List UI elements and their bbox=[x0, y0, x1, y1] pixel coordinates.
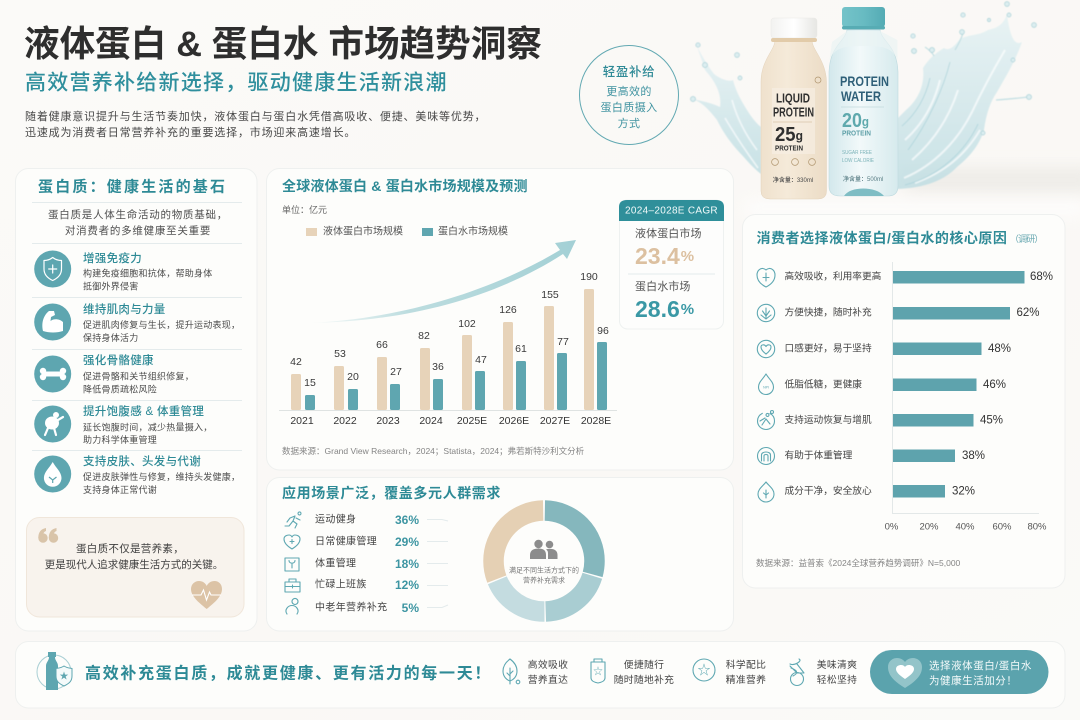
item: bone: 促进骨骼和关节组织修复， bbox=[83, 370, 194, 382]
horizontal bar chart: 62% bbox=[1016, 307, 1040, 319]
horizontal bar chart: 60% bbox=[992, 522, 1012, 532]
protein water bottle: SUGAR FREE bbox=[842, 150, 872, 156]
reason: low fat and sugar: 低脂低糖，更健康 bbox=[784, 378, 862, 390]
item: skin and metabolism: 支持身体正常代谢 bbox=[83, 484, 157, 495]
horizontal bar chart: 20% bbox=[919, 522, 939, 532]
chart heading: 全球液体蛋白 & 蛋白水市场规模及预测 bbox=[282, 178, 528, 194]
donut center: 营养补充需求 bbox=[523, 576, 565, 584]
item: bone: 强化骨骼健康 bbox=[83, 353, 154, 367]
bar chart: 36 bbox=[432, 361, 444, 373]
feature: taste: 美味清爽 bbox=[817, 658, 857, 671]
bar chart: 2021 bbox=[290, 415, 314, 427]
item: satiety: 延长饱腹时间，减少热量摄入， bbox=[83, 421, 213, 432]
row: daily health bbox=[284, 534, 448, 549]
horizontal bar chart bbox=[885, 262, 1053, 532]
horizontal bar chart: 48% bbox=[988, 343, 1011, 355]
bar chart: 53 bbox=[334, 348, 346, 360]
bar chart: 82 bbox=[418, 330, 430, 342]
bar chart: 42 bbox=[290, 356, 302, 368]
horizontal bar chart: 45% bbox=[980, 414, 1003, 426]
panel intro bbox=[48, 208, 228, 237]
liquid protein bottle: 净含量：330ml bbox=[773, 176, 813, 184]
bar chart: 47 bbox=[475, 354, 487, 366]
bar chart: 77 bbox=[557, 336, 569, 348]
feature: scientific formula: 科学配比 bbox=[726, 658, 766, 671]
row: sports bbox=[285, 512, 448, 528]
reasons heading: 消费者选择液体蛋白/蛋白水的核心原因 bbox=[756, 230, 1007, 246]
protein water bottle: 20g bbox=[842, 110, 869, 132]
callout: light supplement circle bbox=[580, 46, 678, 144]
row: weight management: 体重管理 bbox=[315, 556, 356, 570]
bar chart: 126 bbox=[499, 304, 517, 316]
bar chart: 2026E bbox=[499, 415, 529, 427]
protein water bottle: 净含量：500ml bbox=[843, 175, 883, 183]
quote box: 更是现代人追求健康生活方式的关键。 bbox=[45, 558, 223, 571]
feature: taste: 轻松坚持 bbox=[817, 673, 857, 686]
item: muscle bbox=[34, 302, 240, 343]
reason: weight: 有助于体重管理 bbox=[784, 448, 853, 462]
item: bone bbox=[34, 353, 194, 394]
item: immunity: 构建免疫细胞和抗体，帮助身体 bbox=[83, 268, 213, 278]
legend: 液体蛋白市场规模 bbox=[323, 224, 403, 238]
horizontal bar chart: 38% bbox=[962, 450, 985, 462]
icon: bottle with shield bbox=[37, 652, 72, 690]
donut center: 满足不同生活方式下的 bbox=[509, 566, 579, 574]
call to action button bbox=[870, 650, 1048, 694]
panel: consumer reasons bbox=[742, 214, 1065, 588]
call to action button: 选择液体蛋白/蛋白水 bbox=[929, 659, 1032, 672]
growth arrow bbox=[308, 240, 576, 323]
item: immunity bbox=[34, 250, 213, 292]
protein water bottle: LOW CALORIE bbox=[842, 158, 874, 164]
callout: light supplement circle: 方式 bbox=[618, 116, 640, 130]
reason: recovery bbox=[758, 410, 872, 430]
banner slogan: 高效补充蛋白质，成就更健康、更有活力的每一天！ bbox=[85, 664, 492, 682]
row: seniors: 中老年营养补充 bbox=[315, 600, 387, 614]
bar chart: 102 bbox=[458, 318, 476, 330]
panel intro: 蛋白质是人体生命活动的物质基础， bbox=[48, 208, 228, 221]
item: skin and metabolism: 促进皮肤弹性与修复，维持头发健康， bbox=[83, 471, 240, 482]
protein water bottle: PROTEIN bbox=[840, 73, 889, 89]
CAGR card: 28.6% bbox=[635, 296, 694, 322]
item: muscle: 促进肌肉修复与生长，提升运动表现， bbox=[83, 319, 240, 330]
item: satiety bbox=[34, 404, 213, 445]
panel: market size chart bbox=[266, 168, 734, 470]
horizontal bar chart: 80% bbox=[1027, 522, 1047, 532]
title: 液体蛋白 & 蛋白水 市场趋势洞察 bbox=[24, 24, 542, 64]
reason: clean ingredients: 成分干净，安全放心 bbox=[784, 484, 872, 497]
feature: scientific formula bbox=[693, 658, 766, 686]
icon: bottle with shield: ★ bbox=[59, 671, 69, 681]
panel: protein foundation bbox=[16, 168, 257, 631]
liquid protein bottle: PROTEIN bbox=[775, 144, 803, 152]
reason: weight bbox=[758, 448, 853, 464]
row: sports: 运动健身 bbox=[315, 512, 356, 526]
reason: taste: 口感更好，易于坚持 bbox=[784, 342, 872, 354]
quote box: 蛋白质不仅是营养素， bbox=[76, 542, 184, 555]
bar chart: 66 bbox=[376, 339, 388, 351]
quote box bbox=[26, 518, 244, 617]
CAGR card: 2024–2028E CAGR bbox=[625, 206, 718, 216]
bar chart: 155 bbox=[541, 289, 559, 301]
row: office workers: 12% bbox=[395, 578, 419, 592]
panel: use cases bbox=[266, 478, 734, 631]
liquid protein bottle: 25g bbox=[775, 124, 803, 146]
callout: light supplement circle: 更高效的 bbox=[606, 84, 652, 98]
protein water bottle: PROTEIN bbox=[842, 128, 871, 138]
bar chart: 2023 bbox=[376, 415, 400, 427]
row: daily health: 29% bbox=[395, 535, 419, 549]
item: satiety: 提升饱腹感 & 体重管理 bbox=[83, 404, 204, 418]
row: weight management: 18% bbox=[395, 557, 419, 571]
chart source: 数据来源：Grand View Research，2024；Statista，2024；弗若斯特沙利文分析 bbox=[282, 446, 585, 456]
bar chart: 96 bbox=[597, 325, 609, 337]
item: muscle: 保持身体活力 bbox=[83, 332, 139, 343]
bar chart: 2022 bbox=[333, 415, 357, 427]
reason: taste bbox=[757, 340, 872, 358]
liquid protein bottle: LIQUID bbox=[776, 90, 810, 106]
reason: clean ingredients bbox=[758, 482, 872, 502]
feature: taste bbox=[790, 658, 857, 686]
CAGR card bbox=[619, 200, 724, 329]
reason: convenience: 方便快捷，随时补充 bbox=[784, 306, 872, 318]
feature: portable bbox=[591, 658, 674, 686]
item: muscle: 维持肌肉与力量 bbox=[83, 302, 166, 316]
callout: light supplement circle: 蛋白质摄入 bbox=[600, 100, 658, 114]
item: bone: 降低骨质疏松风险 bbox=[83, 384, 157, 394]
panel intro: 对消费者的多维健康至关重要 bbox=[65, 224, 211, 237]
horizontal bar chart: 32% bbox=[952, 486, 975, 498]
donut center bbox=[509, 540, 579, 584]
CAGR card: 23.4% bbox=[635, 243, 694, 269]
legend: 蛋白水市场规模 bbox=[438, 224, 508, 238]
bar chart: 2027E bbox=[540, 415, 570, 427]
call to action button: 为健康生活加分！ bbox=[929, 674, 1017, 687]
feature: portable: 便捷随行 bbox=[624, 658, 664, 671]
intro text: 迅速成为消费者日常营养补充的重要选择，市场迎来高速增长。 bbox=[25, 125, 356, 139]
use case heading: 应用场景广泛，覆盖多元人群需求 bbox=[282, 485, 501, 501]
feature: scientific formula: ☆ bbox=[697, 662, 711, 678]
bar chart: 2025E bbox=[457, 415, 487, 427]
callout: light supplement circle: 轻盈补给 bbox=[603, 64, 655, 79]
liquid protein bottle bbox=[761, 18, 826, 199]
CAGR card: 液体蛋白市场 bbox=[635, 226, 702, 240]
intro text: 随着健康意识提升与生活节奏加快，液体蛋白与蛋白水凭借高吸收、便捷、美味等优势， bbox=[25, 109, 486, 123]
horizontal bar chart: 40% bbox=[955, 522, 975, 532]
bar chart: 20 bbox=[347, 371, 359, 383]
panel heading: 蛋白质：健康生活的基石 bbox=[38, 178, 227, 196]
protein water bottle: WATER bbox=[841, 88, 881, 104]
feature: absorption bbox=[503, 658, 568, 686]
horizontal bar chart: 46% bbox=[983, 379, 1006, 391]
item: satiety: 助力科学体重管理 bbox=[83, 434, 157, 445]
reason: convenience bbox=[757, 304, 872, 322]
item: skin and metabolism: 支持皮肤、头发与代谢 bbox=[83, 454, 201, 468]
feature: portable: 随时随地补充 bbox=[614, 673, 674, 686]
row: sports: 36% bbox=[395, 513, 419, 527]
feature: absorption: 高效吸收 bbox=[528, 658, 568, 671]
CAGR card: 蛋白水市场 bbox=[635, 279, 690, 293]
reason: low fat and sugar: NPI bbox=[763, 386, 769, 390]
reason: absorption bbox=[757, 268, 882, 287]
protein water bottle bbox=[829, 7, 898, 196]
bar chart: 61 bbox=[515, 343, 527, 355]
bar chart: 15 bbox=[304, 377, 316, 389]
bar chart: 190 bbox=[580, 271, 598, 283]
row: daily health: 日常健康管理 bbox=[315, 534, 377, 548]
bar chart: 2028E bbox=[581, 415, 611, 427]
horizontal bar chart: 68% bbox=[1030, 271, 1053, 283]
intro text bbox=[25, 109, 486, 139]
liquid protein bottle: PROTEIN bbox=[773, 104, 814, 120]
unit: 单位：亿元 bbox=[282, 204, 327, 215]
row: office workers bbox=[285, 578, 448, 592]
row: weight management bbox=[285, 556, 448, 571]
reasons source: 数据来源：益普索《2024全球营养趋势调研》N=5,000 bbox=[756, 558, 961, 568]
horizontal bar chart: 0% bbox=[885, 522, 899, 532]
bar chart: 2024 bbox=[419, 415, 443, 427]
feature: absorption: 营养直达 bbox=[528, 673, 568, 686]
row: seniors bbox=[286, 598, 448, 615]
feature: scientific formula: 精准营养 bbox=[726, 673, 766, 686]
donut chart bbox=[494, 510, 594, 612]
item: immunity: 抵御外界侵害 bbox=[83, 280, 139, 292]
item: skin and metabolism bbox=[34, 454, 240, 495]
bar chart: 27 bbox=[390, 366, 402, 378]
bottom banner bbox=[16, 642, 1065, 708]
subtitle: 高效营养补给新选择，驱动健康生活新浪潮 bbox=[25, 72, 448, 94]
row: office workers: 忙碌上班族 bbox=[315, 578, 367, 590]
reason: low fat and sugar bbox=[758, 374, 862, 395]
panel: consumer reasons: （调研） bbox=[1010, 234, 1042, 244]
reason: absorption: 高效吸收，利用率更高 bbox=[784, 270, 882, 282]
product image: bottles and water splash bbox=[690, 2, 1080, 216]
row: seniors: 5% bbox=[402, 601, 419, 615]
feature: portable: ☆ bbox=[593, 666, 603, 678]
legend bbox=[306, 224, 508, 238]
item: immunity: 增强免疫力 bbox=[83, 251, 142, 265]
bar chart bbox=[279, 271, 617, 427]
reason: recovery: 支持运动恢复与增肌 bbox=[784, 413, 872, 426]
